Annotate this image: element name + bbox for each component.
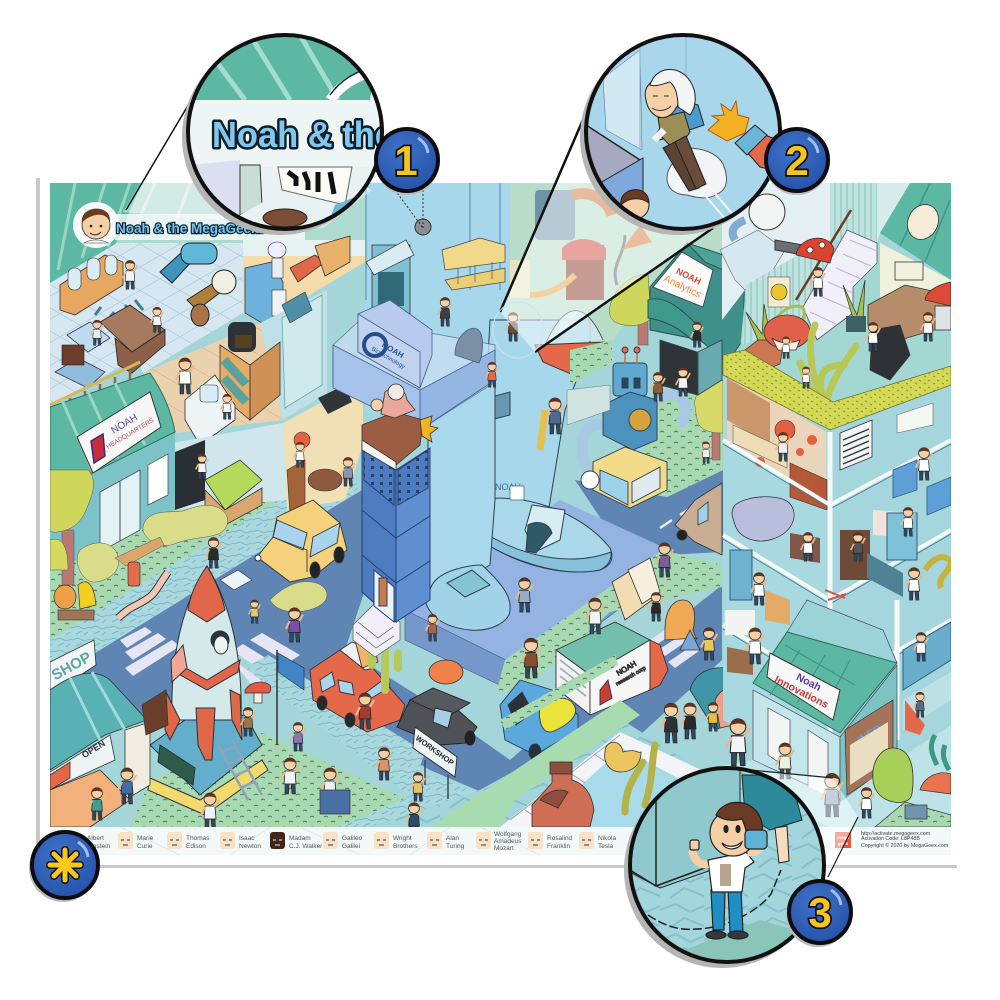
Wright Brothers: Wright [393,835,412,842]
red pod with dome [535,311,607,374]
building: Noah Innovations: INFO [856,723,885,747]
Wolfgang Amadeus Mozart: Amadeus [494,838,522,845]
upper-room furniture [790,533,820,563]
HQ doors [100,470,140,552]
kitchen room [243,236,365,323]
boot opening [525,505,565,552]
cone 2 [493,108,713,358]
storage floor [727,372,826,500]
brown crate [142,690,168,735]
MegaGeex logo: mega [837,835,849,840]
magnifier 2 [580,33,790,235]
green slime ghost [873,748,913,802]
building: right tower [723,370,951,790]
white-green truck: NOAH [615,659,638,678]
vent [840,420,872,470]
rooftop garden room [740,183,951,405]
boot sign: NOAH [495,482,521,492]
magnifier 3 [624,765,835,970]
T SHOP sign: T SHOP [37,649,94,691]
avatar [73,202,119,248]
Isaac Newton [220,832,261,850]
Marie Curie: Curie [137,843,153,850]
orange mascot [665,600,697,640]
brass lamp [415,219,431,235]
pool [370,700,830,827]
building: Noah headquarters [50,373,175,570]
Thomas Edison: Edison [186,843,206,850]
crowd of tiny figures [89,260,935,835]
wright plane [442,238,505,290]
tan van [675,483,722,555]
HQ sign [77,392,161,473]
Madam C.J. Walker: C.J. Walker [289,843,323,850]
bench with yellow reader [54,582,96,620]
grass near hedge [640,375,723,497]
potted leaves [843,280,865,325]
badge 1 [375,129,439,195]
window with awning [372,245,410,315]
skirt [742,775,802,830]
Madam C.J. Walker [270,832,323,850]
cone 1 [123,97,372,228]
rocket cap [745,135,790,172]
black car [397,688,477,745]
HQ sign: NOAH [109,412,140,437]
camera case [320,790,350,814]
lab bench [868,262,951,380]
apple-pear poster [897,403,933,433]
HQ roof [50,372,176,474]
cone 3 [730,768,858,877]
mushroom on wall [796,238,834,263]
cannon and walkway [720,183,877,320]
penguin [455,328,482,363]
Nikola Tesla: Nikola [598,835,616,842]
tree and bushes [50,470,327,612]
upper-right road [575,470,723,555]
biotech logo [364,334,411,370]
Wright Brothers [374,832,418,850]
green slime table [205,460,262,510]
workshop sign: WORKSHOP [414,734,456,767]
central giant leg [425,360,510,630]
Galileo Galilei: Galileo [342,835,363,842]
magnified title: Noah & the [212,114,394,155]
badge 1: 1 [394,137,418,184]
staircase railing [50,362,140,405]
workshop sign [413,727,457,799]
bookshelf [220,345,250,420]
Galileo Galilei [323,832,363,850]
turtle [308,469,342,491]
stair handrail [796,210,851,300]
magnifier 1 [182,33,394,235]
poster scene [37,183,951,835]
yellow car [255,500,347,582]
white floors [723,440,951,690]
Rosalind Franklin: Franklin [547,843,571,850]
Rosalind Franklin [528,832,573,850]
building: Noah Innovations: Innovations [772,674,830,711]
white stairs [803,230,877,340]
wall poster radiation [768,277,790,307]
Isaac Newton: Newton [239,843,261,850]
boot sign [495,482,524,500]
lawn: left garden [50,478,358,658]
activation text: http://activate.megageex.com [861,831,931,837]
piano with Mozart [362,384,438,470]
road grate [220,570,252,590]
tentacles [625,745,655,812]
badge 2: 2 [785,137,809,184]
machines right [903,622,951,690]
yellow-sleeved woman [540,410,545,450]
Alan Turing: Alan [446,835,459,842]
Albert Einstein: Einstein [87,843,111,850]
Isaac Newton: Isaac [239,835,255,842]
Wolfgang Amadeus Mozart: Wolfgang [494,831,522,838]
badge 3 [786,881,851,947]
ladder [218,740,262,800]
orange fish creature [429,660,463,684]
lawn: lower [130,733,408,827]
Alan Turing: Turing [446,843,465,850]
biotech logo: Biotechnology [370,346,406,370]
upper-left lab room [50,243,243,407]
grass strip by plaza [497,550,722,695]
biting tomato plant [764,306,810,350]
windows and doors [768,708,790,770]
crosswalks [120,627,699,688]
door mat and hydrant [115,537,164,586]
cactus [372,645,398,690]
white-green truck [556,622,668,715]
title: Noah & the MegaGeeks [116,221,266,236]
painting stands [612,558,660,620]
Alan Turing [427,832,465,850]
HQ logo [91,434,105,463]
top-left roofs [50,183,365,285]
red van [310,638,405,732]
Albert Einstein: Albert [87,835,104,842]
boy head [621,190,649,219]
hanging lamp wires [395,190,423,230]
display cases [60,255,123,315]
biotech logo: NOAH [380,340,405,360]
building: Noah Analytics: Analytics [662,273,703,301]
beach umbrella and robot on lawn [875,735,951,827]
HQ sign: HEADQUARTERS [105,417,156,451]
MegaGeex logo: geex [838,841,849,846]
rocket [148,566,268,815]
Nikola Tesla [579,832,616,850]
pale lawn right [700,725,951,827]
boy [690,802,767,939]
Einstein [645,69,706,191]
work bench [287,460,305,515]
blue table [67,322,110,352]
white-green truck: research corp [615,666,647,688]
asterisk badge [29,832,98,902]
red boiler submarine [532,762,594,827]
activation text [861,831,949,849]
trees near analytics [610,274,723,460]
building: Noah Analytics: NOAH [675,266,703,287]
Galileo Galilei: Galilei [342,843,360,850]
plaza [405,500,665,665]
lower-floor rooms [173,380,363,525]
rubber duck [605,742,641,772]
moss roof edge [723,350,951,430]
cobble sidewalk [245,655,425,796]
shop with awning: OPEN [80,738,107,760]
server rack [175,440,205,510]
building: Noah Innovations [753,600,897,802]
MegaGeex logo [835,832,851,848]
satellite dish [902,199,944,245]
road network [50,490,722,800]
Thomas Edison: Thomas [186,835,210,842]
large leg and boot, right [480,320,612,572]
jetpack [655,100,704,140]
building: Noah Analytics [648,243,745,395]
purple blob [732,497,794,541]
Madam C.J. Walker: Madam [289,835,311,842]
rocket base [150,715,262,795]
potted plant [745,304,783,372]
rocket smoke [667,148,727,198]
telescope blue [160,252,192,283]
pink worm [118,572,168,618]
activation text: Copyright © 2020 by MegaGeex.com [861,842,949,849]
scissors figure and flasks [95,300,143,320]
vent panel [480,392,510,422]
wall toaster [282,292,312,323]
Wolfgang Amadeus Mozart: Mozart [494,845,514,852]
badge 2 [765,129,829,195]
Marie Curie [118,832,154,850]
faded back-street scene behind lens 2 [505,183,722,345]
teal pod and arrow sign [680,630,755,730]
white steps [353,603,400,657]
legend strip [50,827,951,855]
Thomas Edison [167,832,210,850]
lens cones [123,97,858,877]
robot on cart [581,347,686,508]
poster frame shadow [36,178,957,868]
black piano [318,390,352,414]
activation text: Activation Code: L8P48B [861,836,920,842]
telescope brown [186,284,220,307]
small grass strip near truck [500,655,618,730]
Wright Brothers: Brothers [393,843,418,850]
badge 3: 3 [808,889,832,936]
red mushroom [245,682,271,703]
shop with awning [50,672,150,827]
Marie Curie: Marie [137,835,154,842]
grass and stone wall behind robot [570,340,612,385]
snake plant [800,325,856,396]
Rosalind Franklin: Rosalind [547,835,573,842]
building: Noah Innovations: Noah [794,671,823,694]
dark blue tower [362,442,430,622]
Nikola Tesla: Tesla [598,843,614,850]
flame [708,101,749,141]
header avatar and title band [73,202,305,248]
plaza fence [404,610,618,685]
blue truck [500,680,578,760]
upper platform: Noah Biotech [333,300,495,430]
info kiosk [845,700,893,795]
white counter [185,375,235,445]
Albert Einstein [87,835,111,850]
lower wood room [143,290,327,445]
Wolfgang Amadeus Mozart [476,831,522,852]
desk [100,305,165,352]
flag [277,650,304,745]
central tower upper [365,183,510,413]
blue cube tanks [893,460,951,515]
